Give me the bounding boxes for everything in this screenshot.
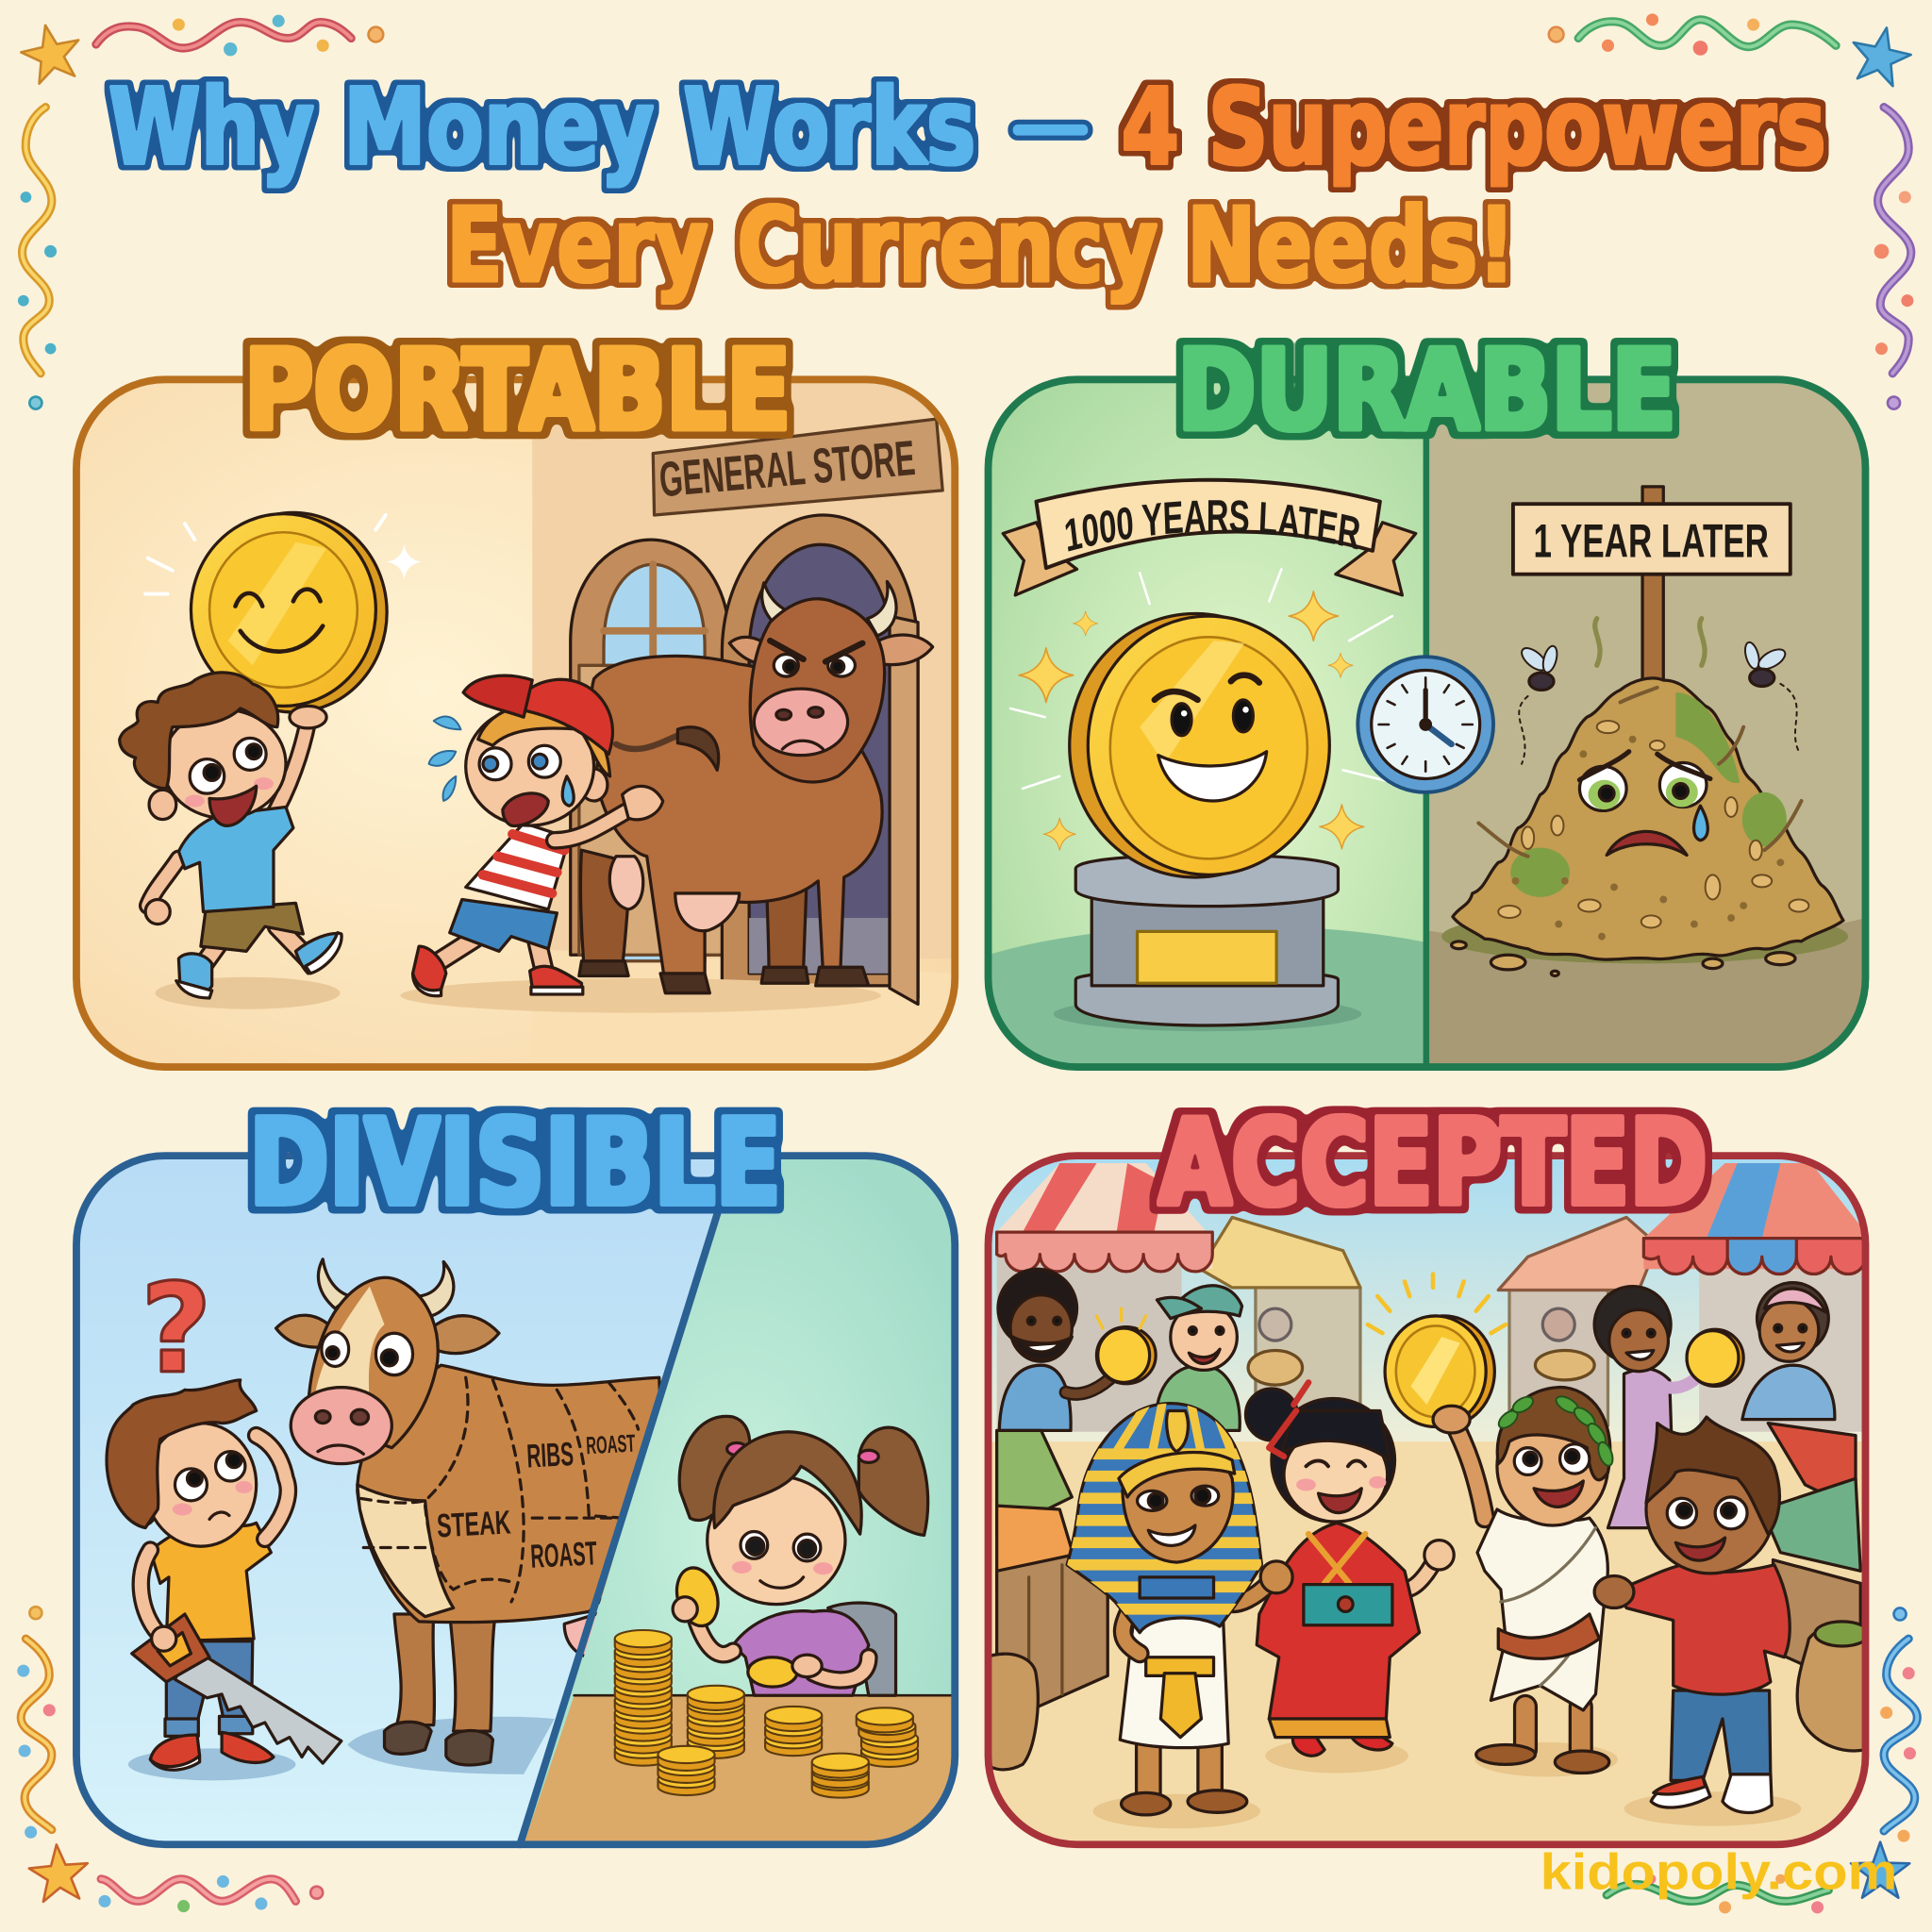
sign post (1642, 487, 1663, 696)
vendors right (1594, 1283, 1835, 1528)
bull head (729, 581, 933, 782)
background stalls (1200, 1217, 1657, 1425)
coin stack three (765, 1707, 822, 1756)
stink lines (1595, 619, 1705, 665)
coin stack five (658, 1746, 715, 1795)
clock (1357, 657, 1493, 792)
right awning (1643, 1163, 1865, 1274)
general store sign: GENERAL STORE (658, 431, 917, 508)
squiggle bottom right side (1884, 1639, 1917, 1831)
sign: 1 year later: 1 YEAR LATER (1533, 514, 1769, 567)
cut lines (359, 1377, 639, 1602)
star top right (1846, 22, 1915, 89)
coin sparkles (145, 515, 422, 594)
chair (828, 1603, 896, 1695)
twigs (1478, 688, 1802, 857)
heading: divisible: DIVISIBLE (249, 1094, 781, 1232)
coin stack tall (615, 1630, 672, 1766)
panel: portable (76, 379, 955, 1067)
big coin (1368, 1274, 1506, 1426)
boy pushing cow (413, 675, 663, 996)
coin: confident (1070, 613, 1329, 877)
red hoodie boy (1594, 1417, 1790, 1813)
coin left (1096, 1308, 1156, 1384)
coin stack six (812, 1754, 869, 1798)
left stall (997, 1163, 1212, 1432)
cut labels: STEAK (436, 1504, 512, 1544)
cow: cut diagram: ROAST (585, 1429, 636, 1459)
sweat drops (429, 716, 460, 801)
crates left (986, 1430, 1108, 1770)
red cap (515, 679, 613, 754)
ground shadows (1093, 1739, 1802, 1828)
sign: 1 year later (1513, 504, 1790, 575)
squiggle right (1878, 108, 1911, 374)
cow: cut diagram: RIBS (525, 1436, 575, 1475)
heading: accepted: ACCEPTED (1158, 1094, 1707, 1232)
squiggle bottom left side (21, 1639, 52, 1830)
crates right (1762, 1424, 1869, 1751)
title (108, 67, 1826, 306)
coin right (1687, 1329, 1743, 1386)
dirt clods (1452, 941, 1795, 975)
sparkles (1010, 569, 1392, 850)
cow: brown bull (579, 581, 933, 993)
shadows (156, 977, 340, 1009)
cow: cut diagram (276, 1259, 665, 1765)
nemes headdress (1059, 1392, 1269, 1633)
title line 1 blue: Why Money Works (108, 67, 975, 190)
panel: accepted (986, 1156, 1869, 1848)
rotten pile (1441, 641, 1848, 975)
squiggle top left (96, 23, 351, 48)
coin stack two (688, 1686, 744, 1758)
pharaoh boy (1059, 1392, 1292, 1815)
pedestal (1054, 855, 1361, 1031)
left awning (997, 1163, 1212, 1272)
girl with coins (671, 1416, 928, 1695)
question mark: ? (141, 1257, 212, 1401)
star bottom right (1851, 1842, 1909, 1898)
pedestal plate (1138, 931, 1276, 983)
sack right (1797, 1625, 1865, 1751)
coin: happy (191, 512, 387, 712)
divider (1424, 379, 1429, 1067)
banner: 1000 years later (1002, 477, 1417, 596)
fly right (1742, 641, 1789, 687)
cow head (276, 1259, 499, 1464)
chinese girl (1245, 1382, 1454, 1756)
window (571, 540, 729, 961)
store door (722, 515, 918, 1004)
general store sign (653, 419, 942, 515)
vendors left (998, 1269, 1242, 1430)
roman boy (1433, 1388, 1615, 1774)
panel: durable (991, 383, 1862, 1064)
title dash (1010, 122, 1091, 138)
star top left (17, 19, 86, 86)
sack left (986, 1654, 1038, 1770)
laurel (1495, 1393, 1615, 1468)
heading: durable: DURABLE (1177, 326, 1676, 456)
diagonal divider (520, 1183, 727, 1844)
fly left (1518, 644, 1559, 690)
saw (132, 1614, 341, 1763)
panel: divisible (76, 1156, 955, 1844)
squiggle top right (1578, 20, 1836, 47)
coin stack four (857, 1707, 918, 1767)
title line 2: Every Currency Needs! (446, 185, 1516, 306)
cow: cut diagram: ROAST (529, 1535, 598, 1575)
heading: portable: PORTABLE (244, 326, 791, 456)
pile face (1579, 752, 1710, 855)
boy with saw (107, 1380, 341, 1770)
squiggle bottom right (1607, 1884, 1828, 1901)
banner: 1000 years later: 1000 YEARS LATER (1066, 500, 1359, 551)
star bottom left (27, 1842, 91, 1903)
watermark: kidopoly.com (1541, 1844, 1897, 1900)
right stall (1643, 1163, 1865, 1432)
shadows (128, 1748, 295, 1780)
boy with coin (120, 673, 341, 998)
squiggle left (23, 108, 52, 374)
squiggle bottom left (101, 1879, 295, 1901)
